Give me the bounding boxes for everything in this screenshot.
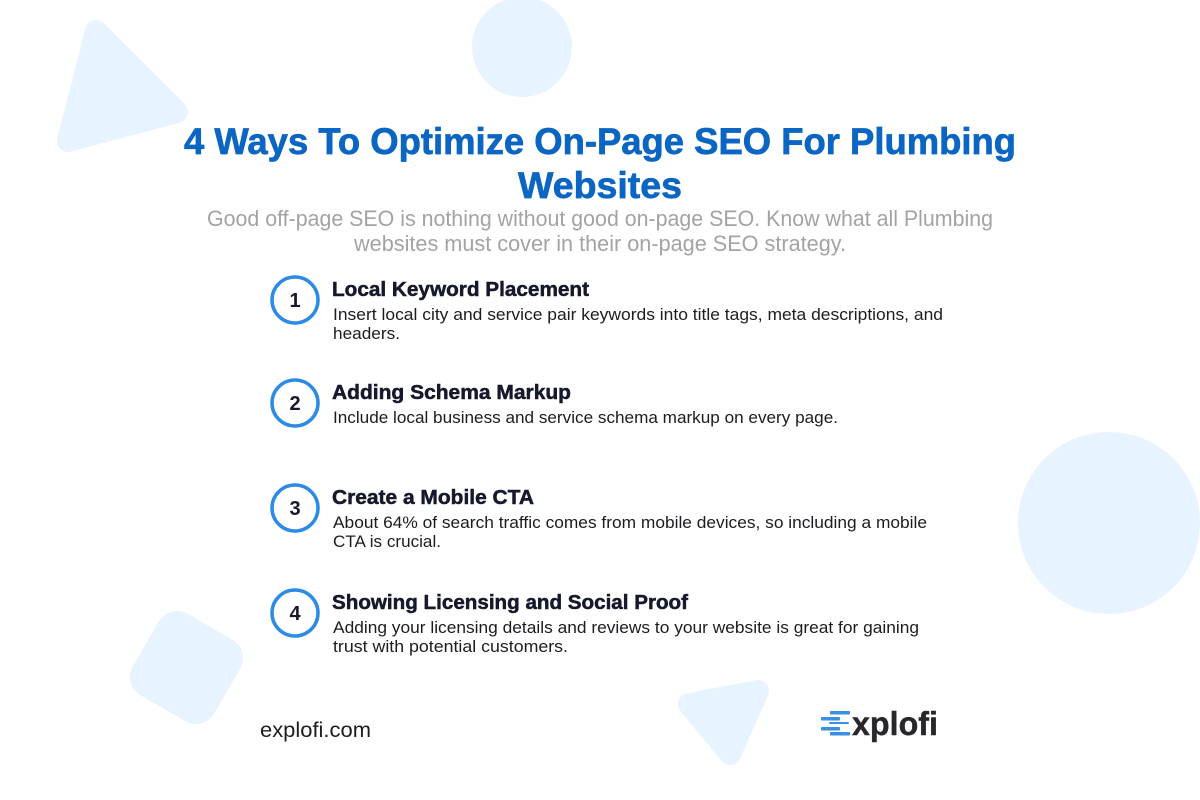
step 4 number badge: 4 xyxy=(289,603,301,625)
step 1 description xyxy=(333,306,943,343)
step 2 number badge: 2 xyxy=(289,393,301,415)
decorative circle top xyxy=(472,0,572,97)
step 3 description: CTA is crucial. xyxy=(333,533,441,551)
title: Websites xyxy=(518,165,682,206)
logo icon: stacked bars xyxy=(821,711,850,736)
step 2 heading: Adding Schema Markup xyxy=(332,382,571,404)
website url: explofi.com xyxy=(260,719,371,742)
step 1 heading: Local Keyword Placement xyxy=(332,279,589,301)
step 1 number badge: 1 xyxy=(289,290,301,312)
step 1 description: headers. xyxy=(333,325,400,343)
decorative triangle top left xyxy=(68,31,177,141)
step 2 description: Include local business and service schema markup on every page. xyxy=(333,409,838,427)
step 3 number badge: 3 xyxy=(289,498,301,520)
step 4 xyxy=(272,590,919,656)
step 4 number badge xyxy=(272,590,318,636)
step 4 description: trust with potential customers. xyxy=(333,638,568,656)
decorative rounded square bottom left xyxy=(122,603,251,732)
subtitle: websites must cover in their on-page SEO strategy. xyxy=(353,231,846,256)
step 2 number badge xyxy=(272,380,318,426)
step 3 number badge xyxy=(272,485,318,531)
decorative circle right xyxy=(1018,432,1200,614)
step 3 description: About 64% of search traffic comes from mobile devices, so including a mobile xyxy=(333,514,927,532)
step 1 xyxy=(272,277,943,343)
subtitle xyxy=(207,206,993,256)
decorative triangle bottom xyxy=(689,691,758,754)
step 3 description xyxy=(333,514,927,551)
title: 4 Ways To Optimize On-Page SEO For Plumbing xyxy=(184,121,1016,162)
logo wordmark: xplofi xyxy=(852,705,938,742)
step 3 heading: Create a Mobile CTA xyxy=(332,487,534,509)
title xyxy=(184,121,1016,206)
subtitle: Good off-page SEO is nothing without good on-page SEO. Know what all Plumbing xyxy=(207,206,993,231)
step 4 heading: Showing Licensing and Social Proof xyxy=(332,592,688,614)
step 1 description: Insert local city and service pair keywords into title tags, meta descriptions, and xyxy=(333,306,943,324)
explofi logo xyxy=(821,705,938,742)
step 1 number badge xyxy=(272,277,318,323)
step 4 description xyxy=(333,619,919,656)
step 4 description: Adding your licensing details and reviews to your website is great for gaining xyxy=(333,619,919,637)
step 2 xyxy=(272,380,838,427)
step 3 xyxy=(272,485,927,551)
